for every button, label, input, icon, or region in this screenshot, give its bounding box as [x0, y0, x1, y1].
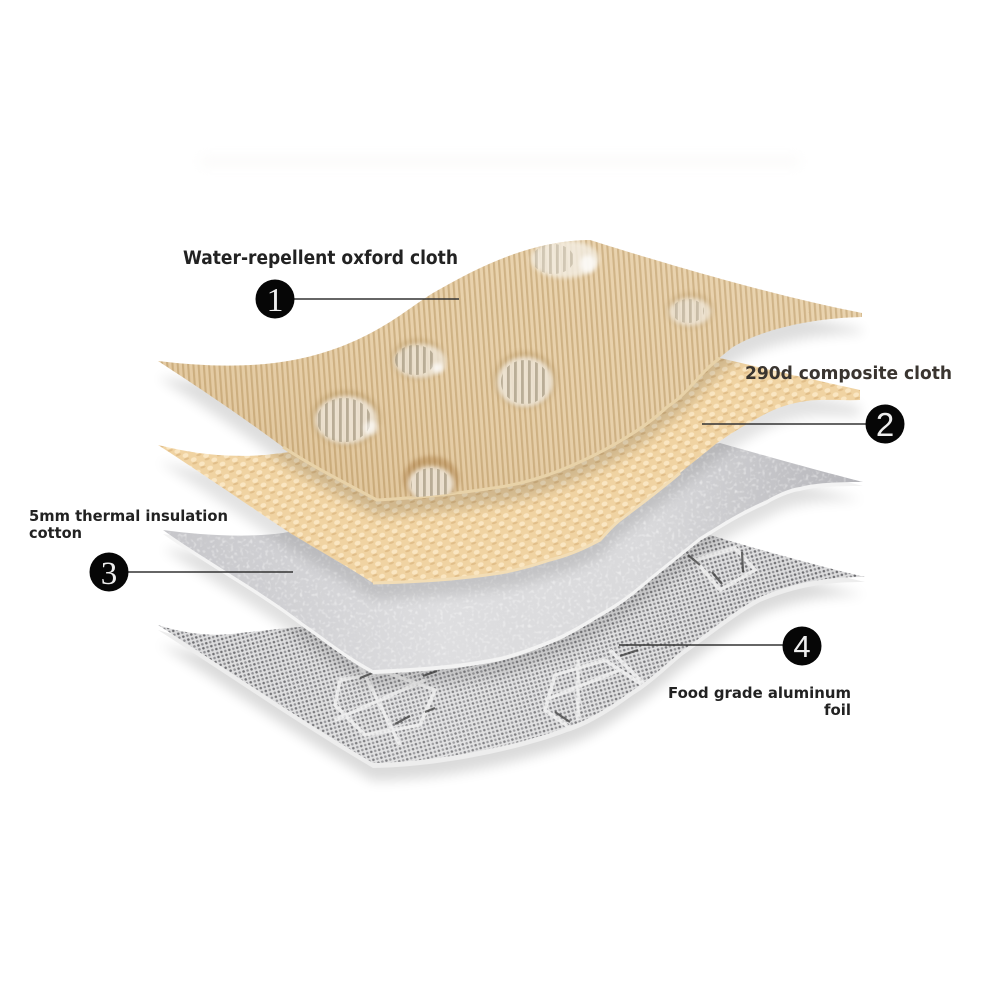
layer 2: 290d composite cloth: [158, 358, 860, 599]
heading 2: 290d composite cloth: [745, 363, 952, 384]
droplet a: [311, 390, 381, 446]
leader line 2: [702, 423, 875, 425]
badge 2: [866, 404, 904, 444]
foil embossed hexagons: [335, 548, 755, 745]
layer 4: aluminum foil: [158, 535, 865, 781]
layer 1: water-repellent oxford cloth: [158, 240, 862, 516]
heading 3: 5mm thermal insulation: [29, 507, 228, 525]
droplet f: [403, 456, 459, 502]
insulation speckle texture: [169, 445, 862, 668]
leader line 1: [285, 298, 459, 300]
heading 4: Food grade aluminum: [668, 684, 851, 702]
heading 4: foil: [824, 701, 851, 719]
heading 3: cotton: [29, 524, 82, 542]
badge 4: 4: [793, 629, 811, 664]
heading 1: Water-repellent oxford cloth: [183, 248, 458, 269]
callout 3: [29, 507, 293, 592]
droplet b: [391, 338, 446, 380]
badge 4: [782, 626, 822, 666]
droplet c: [493, 351, 557, 409]
callout 2: [702, 363, 952, 444]
foil dark creases: [360, 552, 743, 724]
leader line 4: [619, 644, 792, 646]
droplet e: [666, 292, 714, 328]
leader line 3: [118, 571, 293, 573]
badge 1: [256, 280, 294, 319]
droplet d: [531, 240, 599, 278]
callout 4: [619, 626, 856, 719]
water droplets: [311, 240, 714, 502]
callout 1: [183, 248, 459, 319]
badge 2: 2: [876, 406, 894, 443]
badge 3: 3: [101, 556, 117, 592]
badge 3: [90, 552, 128, 592]
faint header band: [200, 157, 800, 166]
layer 3: thermal insulation cotton: [150, 430, 880, 688]
badge 1: 1: [266, 282, 284, 319]
